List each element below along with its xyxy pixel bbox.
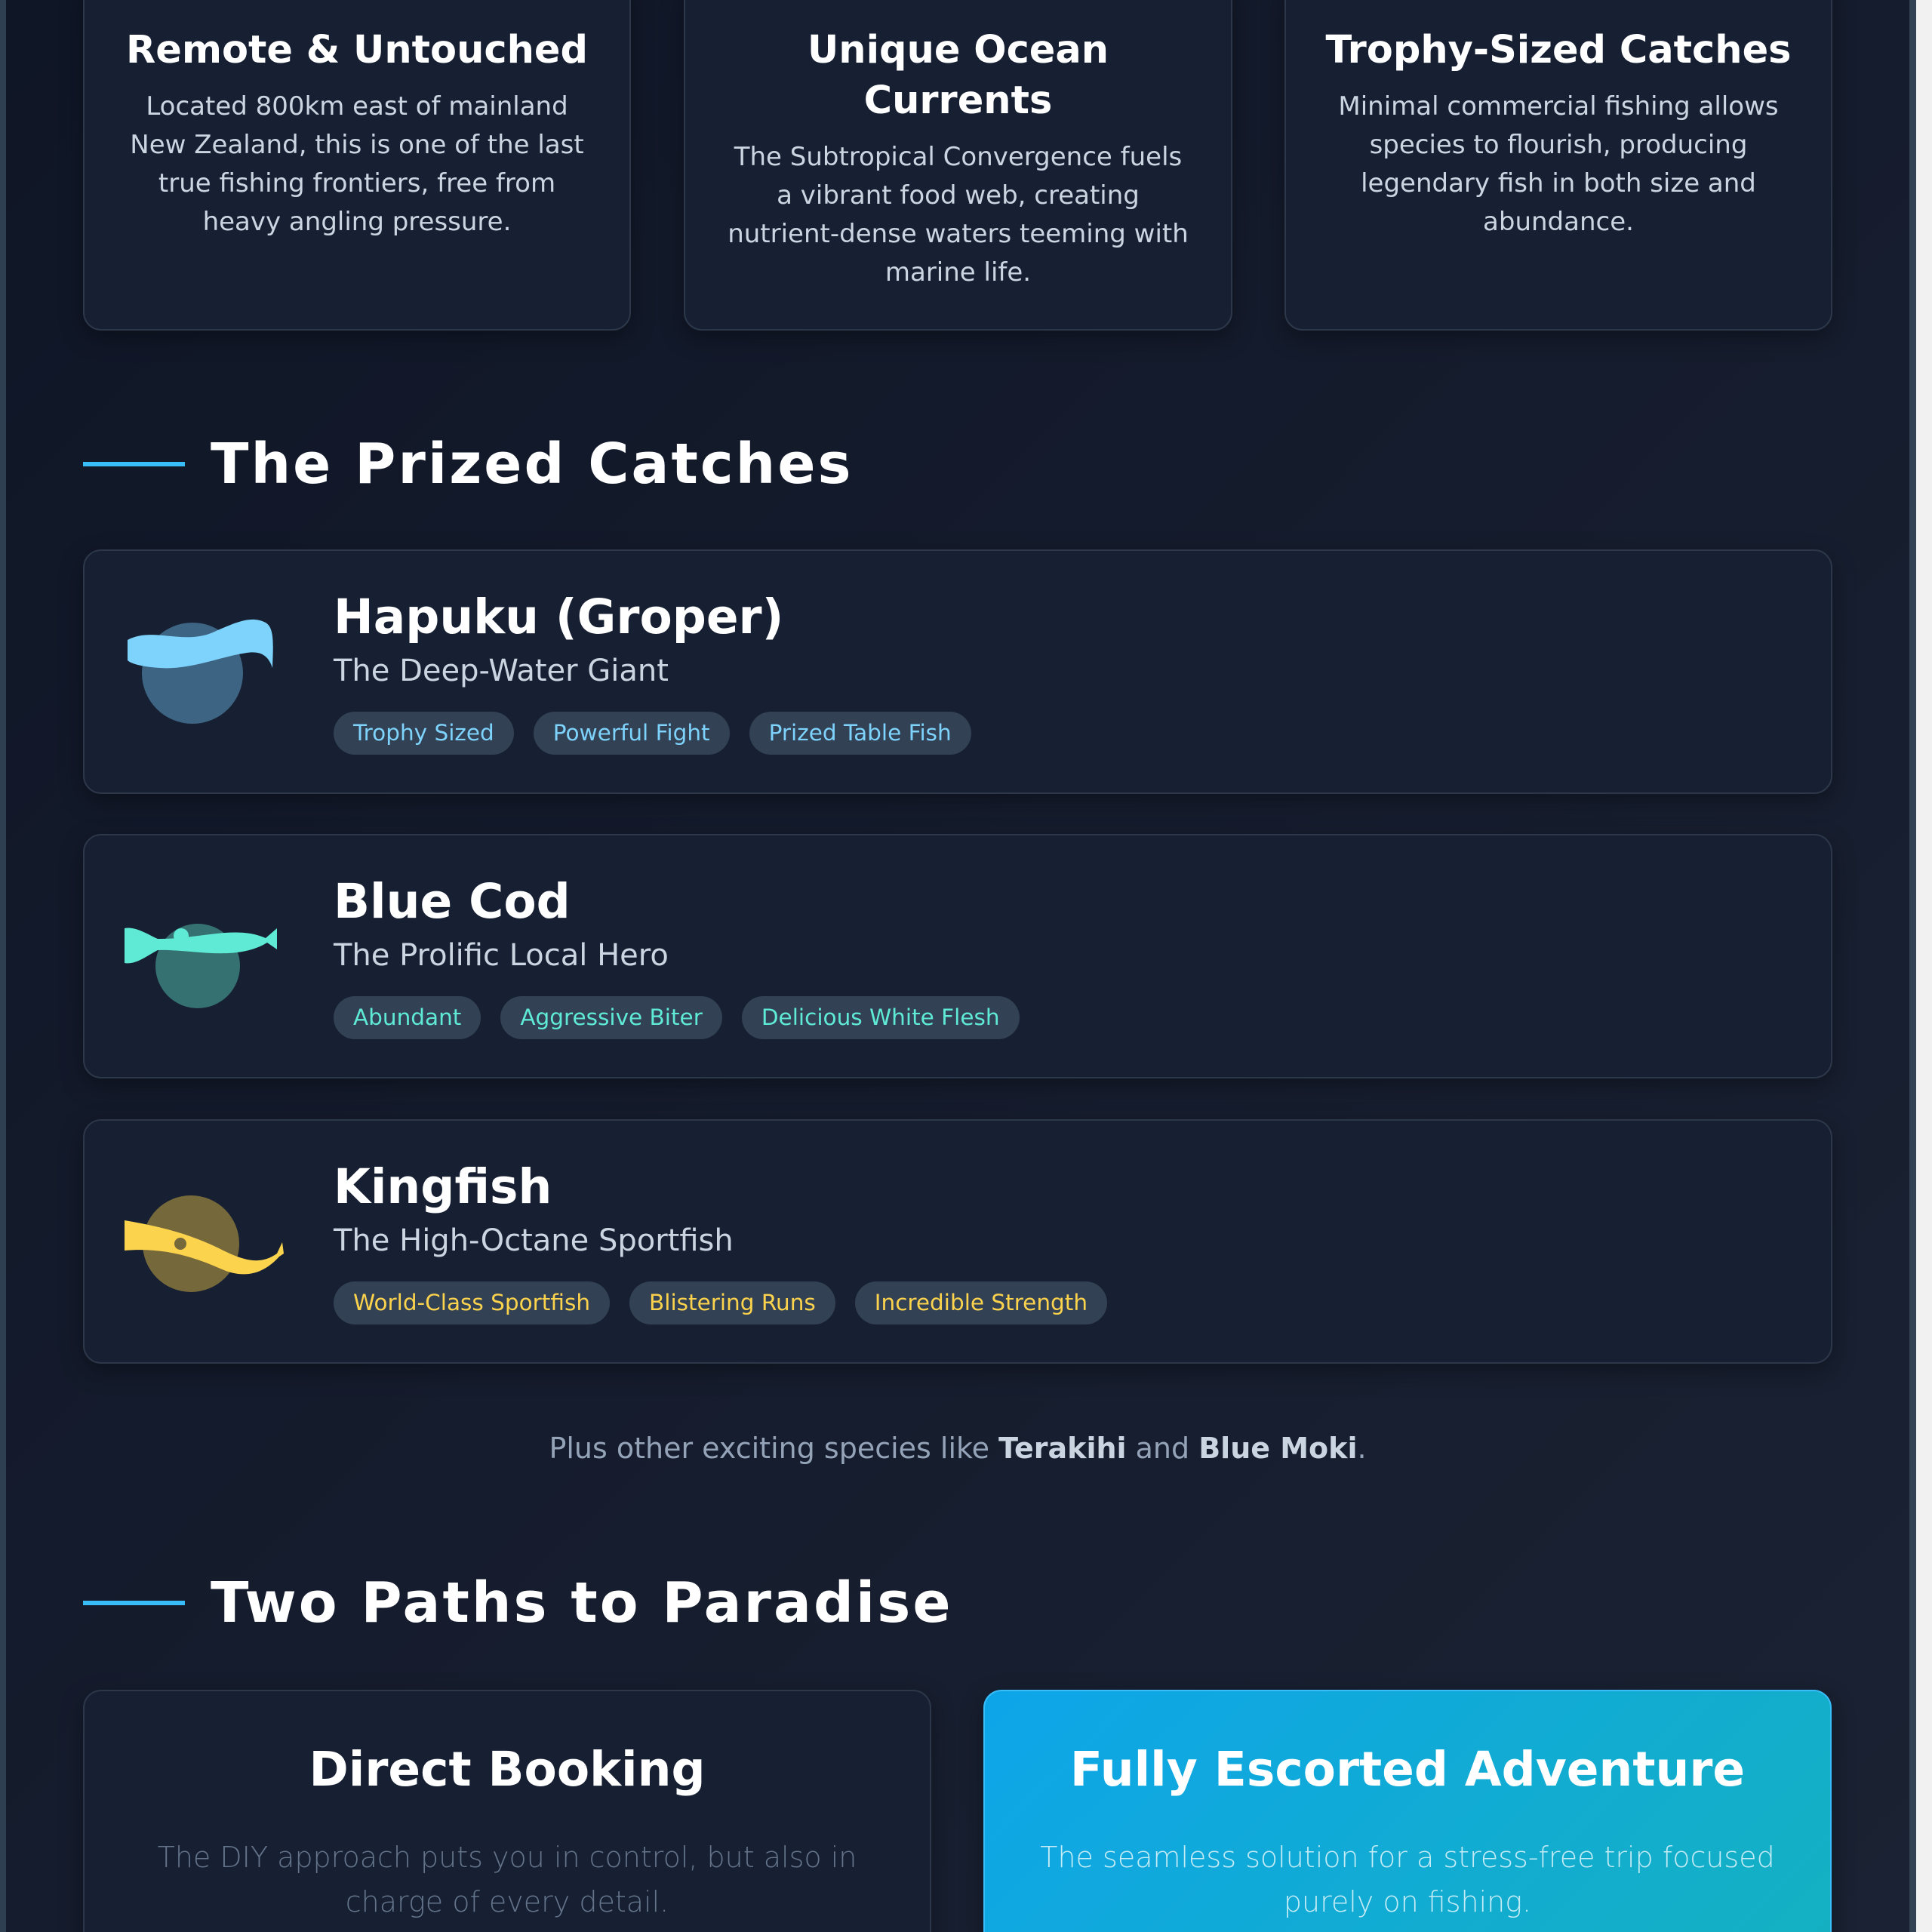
card: trophy-sized catches	[1284, 0, 1832, 331]
card: unique ocean currents	[684, 0, 1232, 331]
text: escorted description: The seamless solution for a stress-free trip focused purely on fishing.	[1040, 1841, 1775, 1918]
tags: Trophy Sized	[353, 720, 494, 746]
card title: Unique Ocean Currents	[808, 28, 1109, 123]
fish name: Hapuku (Groper)	[334, 589, 783, 645]
panel: direct booking	[83, 1690, 931, 1932]
card title: Remote & Untouched	[126, 28, 588, 72]
card body: Minimal commercial fishing allows species to flourish, producing legendary fish in both size and abundance.	[1338, 91, 1779, 237]
tags: Prized Table Fish	[769, 720, 952, 746]
section heading: prized catches: The Prized Catches	[211, 432, 854, 497]
fish name: Blue Cod	[334, 874, 571, 929]
fish card: hapuku	[83, 549, 1832, 794]
tags: Powerful Fight	[553, 720, 710, 746]
tags: Blistering Runs	[649, 1290, 816, 1315]
card: remote & untouched	[83, 0, 631, 331]
icon: blue cod	[125, 924, 277, 1008]
panel: direct booking: Direct Booking	[309, 1742, 706, 1797]
note: other species: Plus other exciting species like Terakihi and Blue Moki.	[549, 1432, 1367, 1465]
tags	[334, 1281, 1107, 1324]
tags	[334, 996, 1020, 1039]
icon: hapuku	[128, 619, 273, 724]
fish card: blue cod	[83, 834, 1832, 1078]
card title: Trophy-Sized Catches	[1325, 28, 1792, 72]
fish card: kingfish	[83, 1119, 1832, 1364]
tags: Abundant	[353, 1004, 461, 1030]
tags: Delicious White Flesh	[761, 1004, 1000, 1030]
section heading: two paths: Two Paths to Paradise	[211, 1571, 953, 1635]
tags: Aggressive Biter	[520, 1004, 703, 1030]
panel: fully escorted adventure: Fully Escorted Adventure	[1070, 1742, 1745, 1797]
fish subtitle: The High-Octane Sportfish	[334, 1223, 734, 1258]
tags	[334, 712, 971, 755]
fish name: Kingfish	[334, 1159, 552, 1214]
fish subtitle: The Deep-Water Giant	[334, 654, 669, 688]
icon: kingfish	[125, 1195, 284, 1292]
fish subtitle: The Prolific Local Hero	[334, 938, 669, 973]
tags: World-Class Sportfish	[353, 1290, 590, 1315]
tags: Incredible Strength	[875, 1290, 1088, 1315]
card body: The Subtropical Convergence fuels a vibrant food web, creating nutrient-dense waters teeming with marine life.	[728, 142, 1189, 288]
card body: Located 800km east of mainland New Zealand, this is one of the last true fishing frontiers, free from heavy angling pressure.	[130, 91, 584, 237]
text: direct booking description: The DIY approach puts you in control, but also in charge of every detail.	[158, 1841, 857, 1918]
panel: fully escorted adventure	[983, 1690, 1832, 1932]
